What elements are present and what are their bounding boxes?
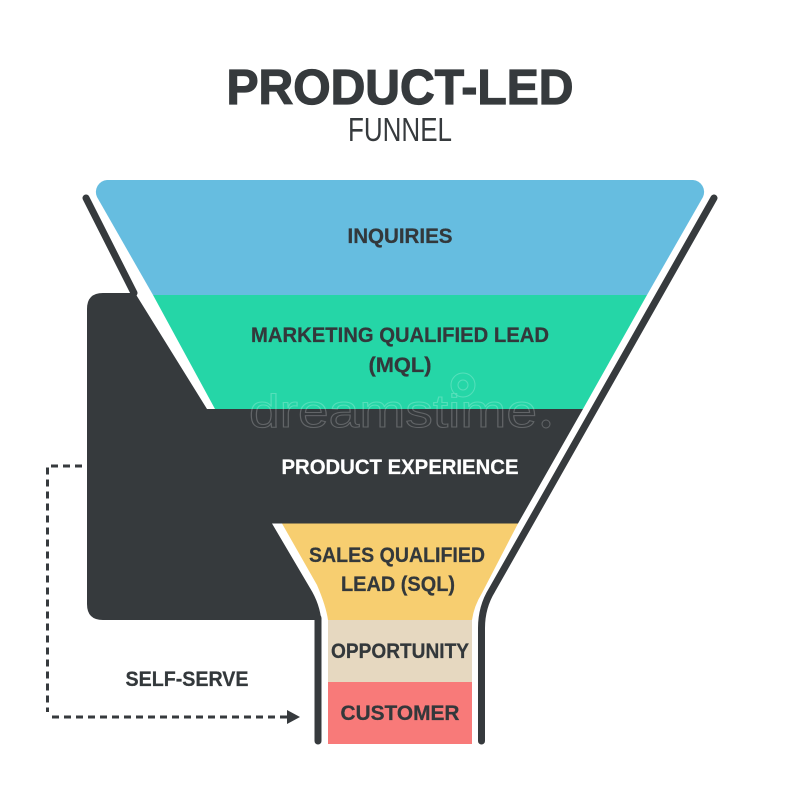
panel: product experience	[87, 293, 583, 622]
label: self-serve: SELF-SERVE	[126, 668, 248, 691]
funnel left wall upper stroke	[86, 198, 134, 293]
panel: inquiries	[96, 180, 704, 295]
title	[226, 61, 574, 148]
panel: sales qualified lead	[282, 524, 518, 620]
label: opportunity: OPPORTUNITY	[331, 640, 469, 663]
label: product experience: PRODUCT EXPERIENCE	[282, 456, 518, 479]
label: lead sql: LEAD (SQL)	[341, 573, 455, 596]
label: sales qualified: SALES QUALIFIED	[309, 544, 485, 567]
title: PRODUCT-LED	[226, 61, 574, 115]
label: inquiries: INQUIRIES	[348, 225, 452, 248]
panel: customer	[328, 682, 472, 744]
funnel right wall stroke	[482, 198, 714, 741]
watermark	[249, 373, 550, 437]
subtitle: FUNNEL	[348, 111, 452, 148]
label: marketing qualified lead: MARKETING QUALIFIED LEAD	[251, 324, 549, 347]
funnel left wall neck stroke	[314, 618, 322, 741]
watermark: dreamstime	[249, 385, 537, 437]
panel: marketing qualified lead	[153, 295, 647, 409]
self-serve dashed arrow	[48, 466, 300, 724]
panel: opportunity	[328, 620, 472, 682]
label: customer: CUSTOMER	[340, 702, 460, 725]
label: mql: (MQL)	[368, 354, 432, 377]
